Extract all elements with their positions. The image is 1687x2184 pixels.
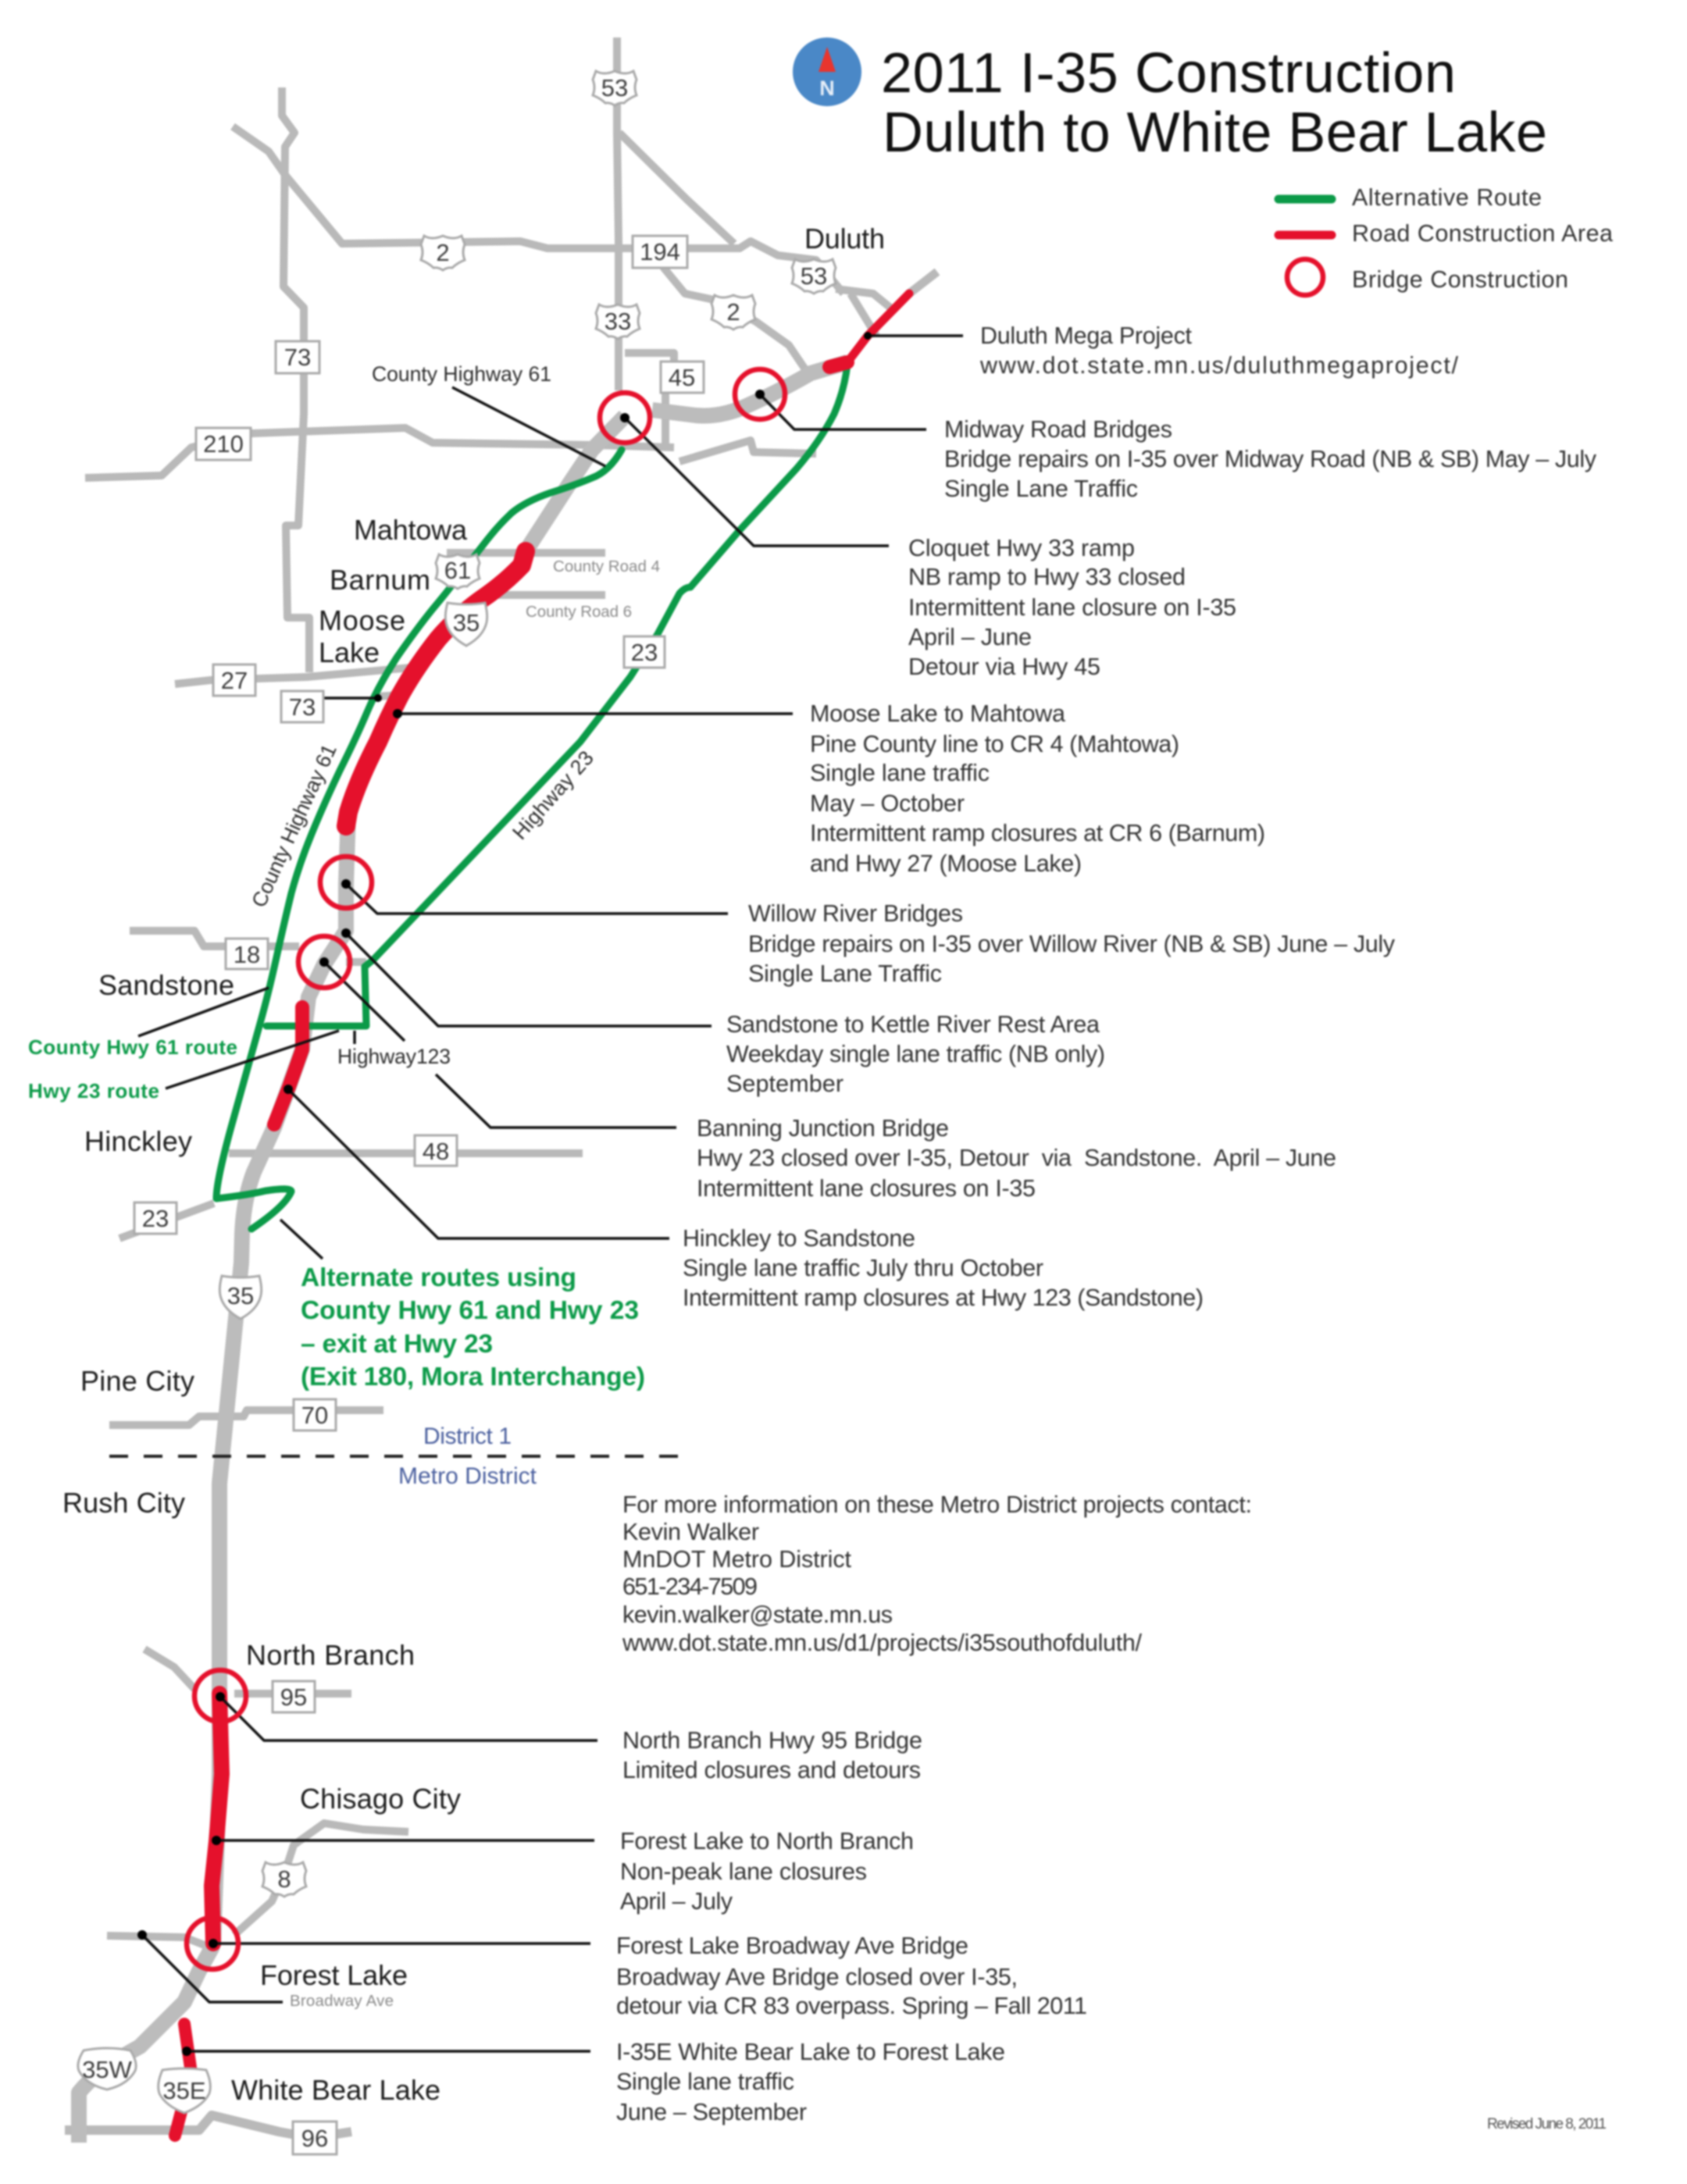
marker: US 53: 53 xyxy=(601,74,628,102)
icon: north compass xyxy=(793,37,861,106)
text block: Duluth Mega Project xyxy=(979,322,1459,379)
marker: 35W: 35W xyxy=(82,2056,133,2083)
text block: Banning Junction Bridge xyxy=(697,1115,1336,1202)
marker: 8: 8 xyxy=(277,1865,291,1893)
green route callouts: – exit at Hwy 23 xyxy=(301,1330,493,1359)
marker: 61: 61 xyxy=(444,557,471,584)
marker: I-35 south: 35 xyxy=(227,1282,254,1309)
marker: 23 south: 23 xyxy=(142,1205,169,1232)
text block: North Branch Hwy 95 Bridge: Limited closures and detours xyxy=(622,1757,921,1783)
road name labels: County Highway 61 xyxy=(372,362,551,386)
text block: Willow River Bridges: Single Lane Traffic xyxy=(748,960,942,987)
text block: Willow River Bridges: Bridge repairs on I-35 over Willow River (NB & SB) June – July xyxy=(748,931,1396,957)
legend: Bridge Construction xyxy=(1352,266,1568,293)
text block: Midway Road Bridges: Bridge repairs on I-35 over Midway Road (NB & SB) May – July xyxy=(944,446,1597,472)
text block: Sandstone to Kettle River Rest Area xyxy=(726,1011,1105,1097)
city labels: Pine City xyxy=(80,1365,194,1397)
road name labels: Highway123 xyxy=(337,1045,451,1068)
marker: 210: 210 xyxy=(203,430,244,458)
marker: US 2 east xyxy=(712,295,755,330)
marker: 73 north: 73 xyxy=(284,344,311,371)
green route callouts: Hwy 23 route xyxy=(28,1079,159,1103)
marker: 96 xyxy=(293,2122,337,2154)
green route callouts: (Exit 180, Mora Interchange) xyxy=(301,1363,645,1391)
marker: US 53 Duluth: 53 xyxy=(801,262,827,290)
title xyxy=(881,42,1547,164)
text block: Hinckley to Sandstone: Hinckley to Sandstone xyxy=(683,1225,915,1252)
road name labels: Highway 23 xyxy=(508,746,598,844)
title: Duluth to White Bear Lake xyxy=(883,102,1547,164)
text block: Cloquet Hwy 33 ramp: April – June xyxy=(908,624,1032,650)
marker: US 2 east: 2 xyxy=(726,298,740,326)
city labels: Duluth xyxy=(804,223,885,255)
text block: Hinckley to Sandstone: Single lane traffic July thru October xyxy=(683,1255,1043,1281)
district boundary xyxy=(109,1423,681,1489)
city labels: Hinckley xyxy=(84,1125,192,1157)
green route callouts: Alternate routes using xyxy=(301,1263,576,1292)
city labels: Sandstone xyxy=(98,969,234,1001)
marker: 73 north xyxy=(276,341,319,373)
text block: Banning Junction Bridge: Intermittent lane closures on I-35 xyxy=(697,1175,1036,1202)
city labels: Moose xyxy=(319,604,405,636)
road name labels: County Road 6 xyxy=(526,603,632,621)
text block: Midway Road Bridges: Midway Road Bridges xyxy=(944,416,1172,443)
text block: Forest Lake Broadway Ave Bridge: detour via CR 83 overpass. Spring – Fall 2011 xyxy=(616,1993,1087,2019)
marker: US 53 xyxy=(593,71,637,105)
text block: Cloquet Hwy 33 ramp: Cloquet Hwy 33 ramp xyxy=(908,535,1135,561)
marker: 48: 48 xyxy=(423,1138,449,1165)
marker: US 2 west xyxy=(421,236,465,270)
city labels xyxy=(62,223,885,2106)
marker: 210 xyxy=(196,428,251,460)
text block: Sandstone to Kettle River Rest Area: Sandstone to Kettle River Rest Area xyxy=(726,1011,1100,1038)
city labels: Rush City xyxy=(62,1487,185,1519)
green route callouts xyxy=(28,1035,645,1391)
marker: 70 xyxy=(294,1399,336,1430)
route markers xyxy=(78,71,836,2154)
city labels: Lake xyxy=(319,636,380,668)
text block: North Branch Hwy 95 Bridge: North Branch Hwy 95 Bridge xyxy=(622,1727,922,1754)
marker: 18: 18 xyxy=(234,941,260,968)
marker: 27 xyxy=(213,664,255,696)
marker: 61 xyxy=(436,554,480,589)
text block: I-35E White Bear Lake to Forest Lake: I-35E White Bear Lake to Forest Lake xyxy=(616,2039,1005,2065)
marker: 23 north xyxy=(624,636,665,668)
marker: 95 xyxy=(273,1681,315,1712)
icon: north compass: N xyxy=(819,77,835,100)
marker: 33: 33 xyxy=(605,308,631,335)
road name labels: Broadway Ave xyxy=(290,1992,394,2010)
city labels: Chisago City xyxy=(300,1783,461,1815)
text block: Willow River Bridges xyxy=(748,900,1396,987)
text block: Moose Lake to Mahtowa: Single lane traffic xyxy=(810,760,990,786)
legend: Alternative Route xyxy=(1352,184,1542,211)
marker: 35E xyxy=(159,2068,210,2113)
road name labels: County Highway 61 xyxy=(247,740,341,910)
legend: Road Construction Area xyxy=(1352,220,1613,247)
text block: Moose Lake to Mahtowa xyxy=(810,700,1265,877)
text block: Hinckley to Sandstone xyxy=(683,1225,1204,1311)
marker: 33 xyxy=(596,305,640,339)
marker: 18 xyxy=(226,939,268,969)
text block: Cloquet Hwy 33 ramp: NB ramp to Hwy 33 closed xyxy=(908,564,1186,590)
marker: 48 xyxy=(415,1135,457,1166)
text block: Banning Junction Bridge: Hwy 23 closed over I-35, Detour via Sandstone. April – June xyxy=(697,1145,1336,1171)
marker: 35W xyxy=(78,2048,136,2090)
title: 2011 I-35 Construction xyxy=(881,42,1456,105)
text block: Cloquet Hwy 33 ramp: Intermittent lane closure on I-35 xyxy=(908,594,1236,621)
text block: Forest Lake to North Branch: Non-peak lane closures xyxy=(620,1858,867,1885)
leader lines xyxy=(137,332,963,2056)
marker: I-35 north: 35 xyxy=(453,609,480,636)
green route callouts: County Hwy 61 and Hwy 23 xyxy=(301,1296,639,1325)
text block: Sandstone to Kettle River Rest Area: Weekday single lane traffic (NB only) xyxy=(726,1041,1105,1067)
text block: Forest Lake Broadway Ave Bridge: Forest Lake Broadway Ave Bridge xyxy=(616,1933,968,1959)
revision note: Revised June 8, 2011 xyxy=(1487,2116,1607,2132)
district boundary: District 1 xyxy=(423,1423,512,1449)
road construction areas xyxy=(175,294,909,2136)
road name labels: County Road 4 xyxy=(553,558,660,575)
text block: Moose Lake to Mahtowa: Intermittent ramp closures at CR 6 (Barnum) xyxy=(810,820,1265,846)
marker: 73 south: 73 xyxy=(289,693,316,721)
gray road network xyxy=(65,37,937,2138)
marker: 8 xyxy=(262,1862,306,1897)
text block: Metro District contact xyxy=(622,1491,1252,1656)
marker: 45: 45 xyxy=(669,364,695,391)
text block: Metro District contact: Kevin Walker xyxy=(622,1519,759,1545)
road name labels xyxy=(247,362,660,2010)
text block: Moose Lake to Mahtowa: and Hwy 27 (Moose Lake) xyxy=(810,850,1082,877)
marker: 70: 70 xyxy=(301,1402,328,1429)
text block: Metro District contact: www.dot.state.mn.us/d1/projects/i35southofduluth/ xyxy=(622,1630,1143,1656)
marker: 96: 96 xyxy=(301,2125,328,2152)
district boundary: Metro District xyxy=(398,1463,537,1489)
text block: Forest Lake to North Branch: April – July xyxy=(620,1888,733,1915)
text block: Forest Lake to North Branch: Forest Lake to North Branch xyxy=(620,1828,914,1854)
legend xyxy=(1279,184,1613,295)
text block: Moose Lake to Mahtowa: Moose Lake to Mahtowa xyxy=(810,700,1065,727)
marker: 194 xyxy=(633,236,687,268)
text block: Metro District contact: kevin.walker@state.mn.us xyxy=(622,1601,893,1628)
marker: I-35 south xyxy=(219,1276,262,1319)
text block: North Branch Hwy 95 Bridge xyxy=(622,1727,922,1783)
text block: Willow River Bridges: Willow River Bridges xyxy=(748,900,963,927)
text block: Forest Lake to North Branch xyxy=(620,1828,914,1915)
text block: Moose Lake to Mahtowa: Pine County line to CR 4 (Mahtowa) xyxy=(810,731,1179,757)
marker: 23 south xyxy=(134,1202,177,1234)
city labels: White Bear Lake xyxy=(231,2074,440,2106)
text block: Forest Lake Broadway Ave Bridge: Broadway Ave Bridge closed over I-35, xyxy=(616,1964,1018,1990)
text block: I-35E White Bear Lake to Forest Lake: Single lane traffic xyxy=(616,2068,794,2095)
text block: Cloquet Hwy 33 ramp: Detour via Hwy 45 xyxy=(908,654,1100,680)
text block: Duluth Mega Project: Duluth Mega Project xyxy=(980,322,1193,349)
marker: 45 xyxy=(661,362,704,393)
marker: 95: 95 xyxy=(280,1683,307,1711)
marker: 194: 194 xyxy=(640,238,680,265)
city labels: Barnum xyxy=(330,564,430,596)
text block: Sandstone to Kettle River Rest Area: September xyxy=(726,1071,844,1097)
text block: Duluth Mega Project: www.dot.state.mn.us/duluthmegaproject/ xyxy=(979,352,1459,379)
text block: Midway Road Bridges: Single Lane Traffic xyxy=(944,476,1138,502)
text block: Moose Lake to Mahtowa: May – October xyxy=(810,790,965,817)
marker: 23 north: 23 xyxy=(631,639,658,666)
marker: 73 south xyxy=(281,691,323,722)
marker: 27: 27 xyxy=(221,667,248,694)
I-35 main highway xyxy=(79,362,847,2143)
city labels: Mahtowa xyxy=(354,514,468,546)
alternative route: Hwy 23 xyxy=(266,365,847,1026)
green route callouts: County Hwy 61 route xyxy=(28,1035,237,1059)
text block: Banning Junction Bridge: Banning Junction Bridge xyxy=(697,1115,949,1142)
alternative route: County Hwy 61 xyxy=(216,450,622,1229)
text block: Midway Road Bridges xyxy=(944,416,1597,502)
text block: Cloquet Hwy 33 ramp xyxy=(908,535,1236,680)
city labels: North Branch xyxy=(246,1639,415,1671)
marker: US 53 Duluth xyxy=(792,259,836,294)
marker: I-35 north xyxy=(445,603,487,646)
marker: 35E: 35E xyxy=(162,2077,206,2104)
text block: Hinckley to Sandstone: Intermittent ramp closures at Hwy 123 (Sandstone) xyxy=(683,1284,1204,1311)
text block: Metro District contact: MnDOT Metro District xyxy=(622,1546,852,1573)
text block: Metro District contact: 651-234-7509 xyxy=(622,1573,758,1600)
text block: Forest Lake Broadway Ave Bridge xyxy=(616,1933,1087,2019)
city labels: Forest Lake xyxy=(260,1959,408,1991)
text block: I-35E White Bear Lake to Forest Lake: June – September xyxy=(616,2099,807,2125)
bridge construction circles xyxy=(187,369,785,1969)
text block: I-35E White Bear Lake to Forest Lake xyxy=(616,2039,1005,2125)
marker: US 2 west: 2 xyxy=(436,239,450,266)
text block: Metro District contact: For more information on these Metro District projects contact: xyxy=(622,1491,1252,1518)
